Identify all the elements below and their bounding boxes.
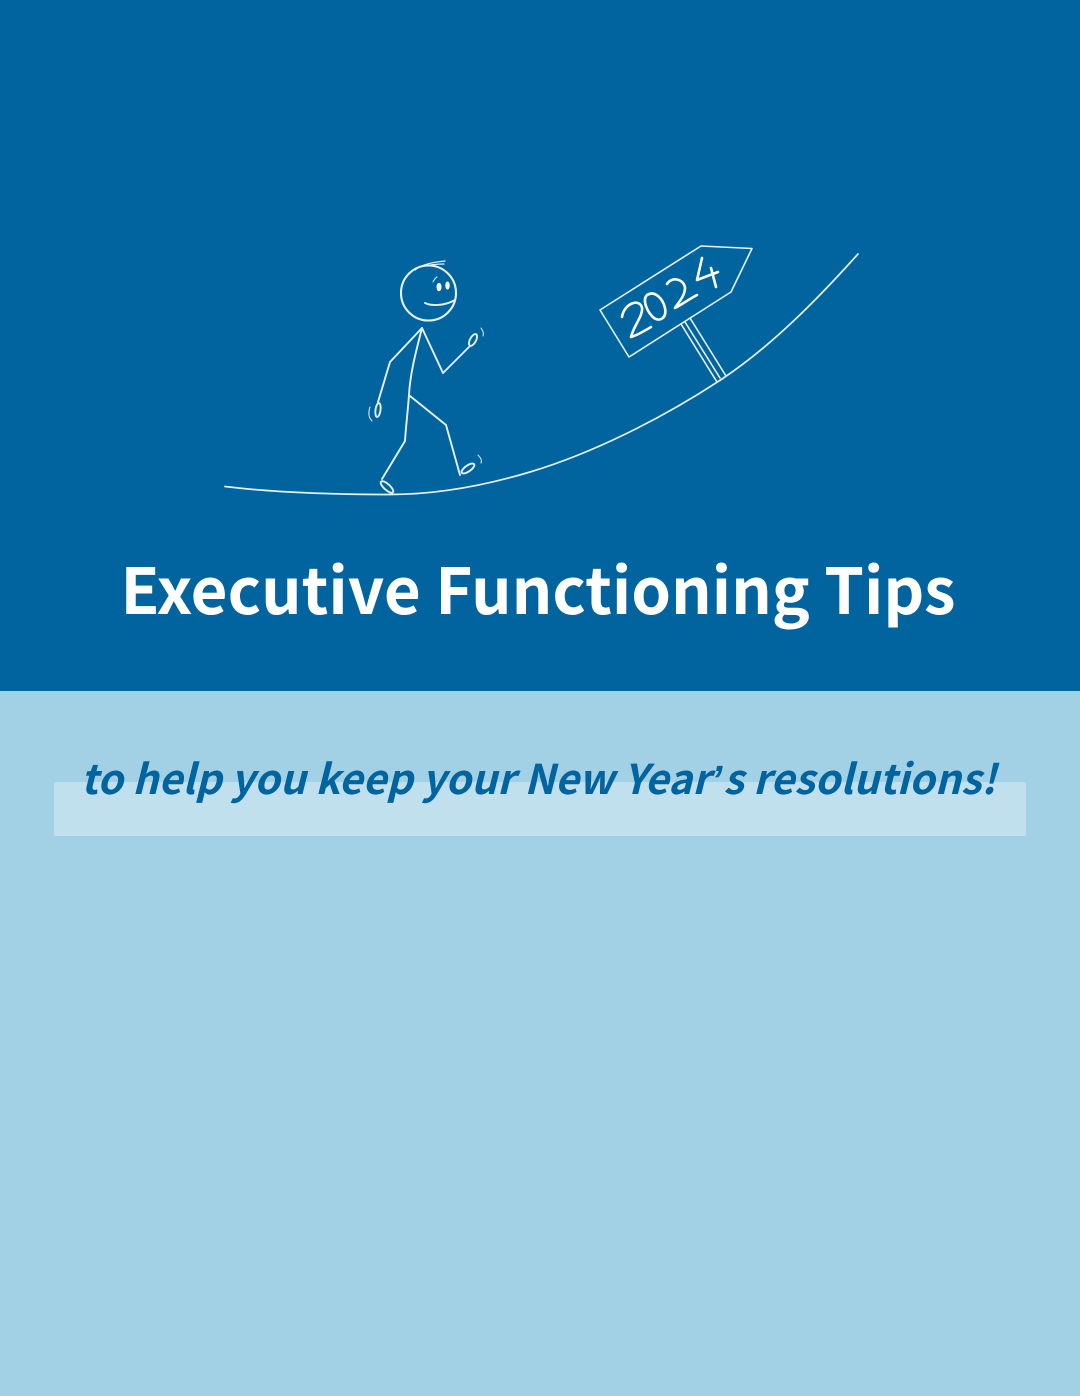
illustration: stick figure walking up a slope to a 2024 sign [224,245,859,496]
hill curve [225,254,858,494]
highlight band [54,782,1026,836]
subtitle: to help you keep your New Year’s resolutions! [81,746,996,806]
2024 lettering [622,258,718,337]
post [681,318,726,382]
face [425,277,454,305]
front foot [460,462,476,475]
head [401,266,456,320]
hair [415,261,445,270]
rear arm [378,328,422,402]
body and rear leg [382,328,422,479]
rear hand [375,403,381,417]
front hand [467,333,479,347]
front leg [410,396,460,475]
rear foot [379,479,395,495]
sign board [600,246,752,357]
front arm [422,328,469,373]
signpost [600,246,752,382]
stick figure [369,261,483,495]
header panel [0,0,1080,691]
title: Executive Functioning Tips [120,541,956,633]
